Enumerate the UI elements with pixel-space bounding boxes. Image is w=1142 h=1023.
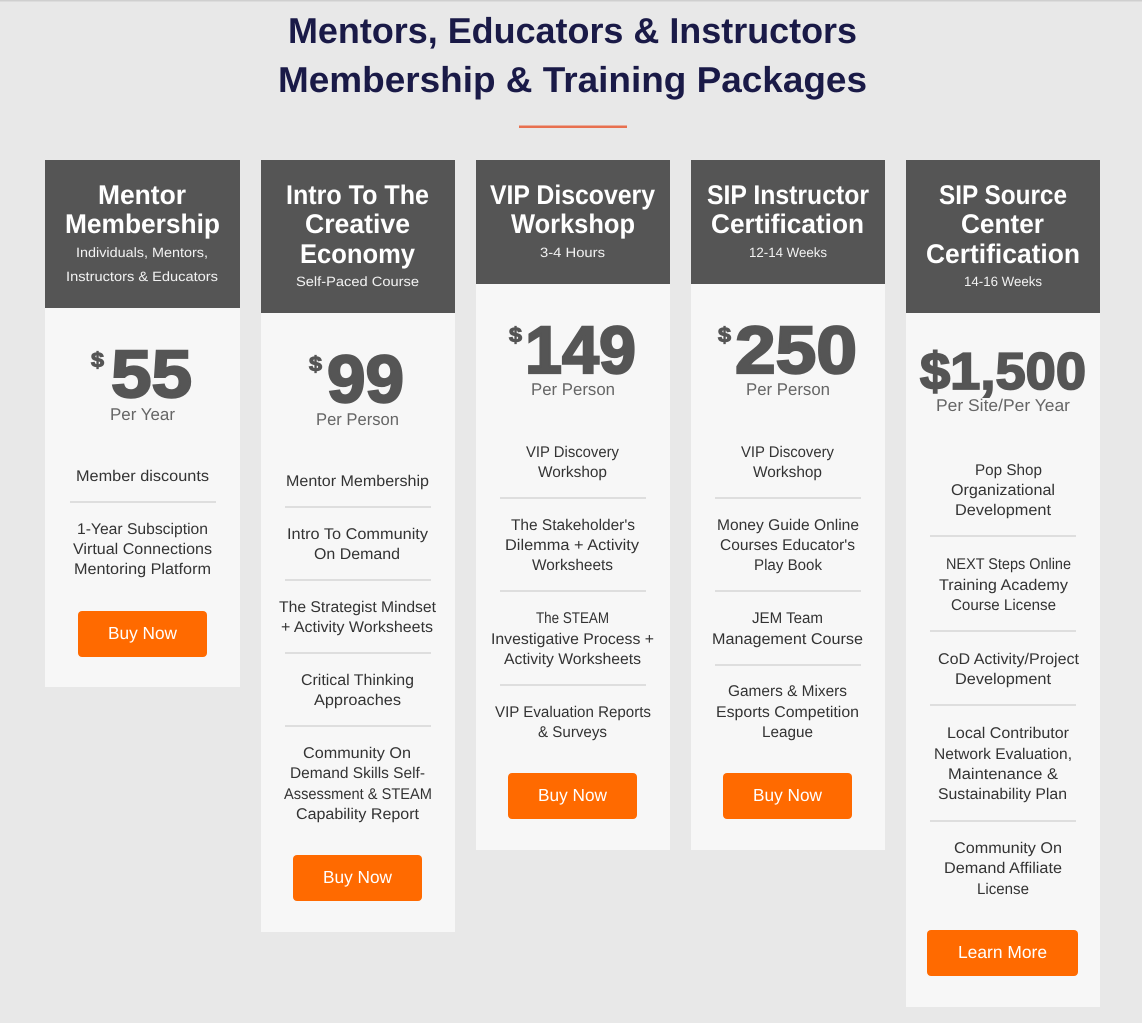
feature list: On Demand — [314, 546, 400, 563]
feature list: License — [977, 881, 1029, 898]
header: SIP Instructor Certification: Certification — [711, 209, 864, 239]
price: $1,500 per site per year: Per Site/Per Year — [936, 396, 1070, 415]
price: $99 per person: 99 — [327, 342, 404, 417]
header: SIP Source Center Certification: 14-16 Weeks — [964, 274, 1042, 289]
feature list: VIP Discovery — [741, 444, 834, 461]
feature list: Community On — [303, 745, 411, 762]
header: Mentor Membership: Mentor — [98, 180, 186, 210]
feature list — [70, 468, 216, 578]
feature list: Pop Shop — [975, 462, 1042, 479]
button: Learn More: Learn More — [958, 942, 1047, 962]
header: SIP Source Center Certification: SIP Source — [939, 180, 1067, 210]
header: VIP Discovery Workshop: Workshop — [511, 209, 635, 239]
feature list — [930, 462, 1080, 898]
feature list: Management Course — [712, 631, 863, 648]
feature list: Critical Thinking — [301, 672, 414, 689]
feature list: The Stakeholder's — [511, 517, 635, 534]
feature list: Virtual Connections — [73, 541, 212, 558]
feature list: The Strategist Mindset — [279, 599, 437, 616]
button: Buy Now: Buy Now — [108, 623, 177, 643]
feature list: Money Guide Online — [717, 517, 859, 534]
price: $55 per year — [91, 337, 192, 424]
title underline — [519, 126, 627, 128]
button: Buy Now — [78, 611, 207, 657]
feature list: Member discounts — [76, 468, 209, 485]
button: Buy Now — [508, 773, 637, 819]
header: Intro To The Creative Economy: Intro To The — [286, 180, 429, 210]
header: Intro To The Creative Economy: Creative — [305, 209, 410, 239]
feature list: Dilemma + Activity — [505, 537, 639, 554]
price: $99 per person: $ — [309, 353, 322, 376]
header: SIP Instructor Certification — [691, 160, 885, 284]
feature list: Workshop — [538, 464, 607, 481]
feature list: Demand Skills Self- — [290, 765, 425, 782]
panel: Mentor Membership — [45, 160, 240, 687]
price: $149 per person: $ — [509, 324, 522, 347]
price: $55 per year: Per Year — [110, 405, 175, 424]
button: Buy Now — [723, 773, 852, 819]
header: Intro To The Creative Economy: Economy — [300, 239, 415, 269]
panel: Intro To The Creative Economy — [261, 160, 455, 932]
feature list: Mentoring Platform — [74, 561, 211, 578]
feature list: League — [762, 724, 813, 741]
button: Buy Now: Buy Now — [323, 867, 392, 887]
panel: SIP Source Center Certification — [906, 160, 1100, 1007]
title — [278, 10, 867, 100]
feature list: Investigative Process + — [491, 631, 654, 648]
feature list: + Activity Worksheets — [281, 619, 433, 636]
feature list: Worksheets — [532, 557, 613, 574]
header: SIP Source Center Certification — [906, 160, 1100, 313]
header: VIP Discovery Workshop — [476, 160, 670, 284]
panel: VIP Discovery Workshop — [476, 160, 670, 850]
button: Buy Now: Buy Now — [753, 785, 822, 805]
feature list: Assessment & STEAM — [284, 786, 432, 803]
title: Mentors, Educators & Instructors — [288, 10, 857, 51]
feature list: Approaches — [314, 692, 401, 709]
feature list: Gamers & Mixers — [728, 683, 847, 700]
title: Membership & Training Packages — [278, 59, 867, 100]
feature list: Course License — [951, 597, 1056, 614]
feature list: Esports Competition — [716, 704, 859, 721]
feature list: Activity Worksheets — [504, 651, 641, 668]
feature list: Play Book — [754, 557, 822, 574]
price: $55 per year: $ — [91, 349, 104, 372]
feature list: Development — [955, 671, 1052, 688]
feature list: VIP Discovery — [526, 444, 619, 461]
feature list: VIP Evaluation Reports — [495, 704, 651, 721]
price: $1,500 per site per year: $1,500 — [920, 343, 1086, 401]
feature list: Mentor Membership — [286, 473, 429, 490]
header: VIP Discovery Workshop: 3-4 Hours — [540, 245, 605, 260]
price: $149 per person: Per Person — [531, 380, 615, 399]
feature list — [491, 444, 654, 741]
feature list: Community On — [954, 840, 1062, 857]
header: Mentor Membership — [45, 160, 240, 308]
header: SIP Source Center Certification: Center — [961, 209, 1044, 239]
price: $250 per person: $ — [718, 324, 731, 347]
header: Mentor Membership: Instructors & Educators — [66, 269, 218, 284]
feature list: Courses Educator's — [720, 537, 855, 554]
feature list: Network Evaluation, — [934, 746, 1072, 763]
header: VIP Discovery Workshop: VIP Discovery — [490, 180, 655, 210]
price: $250 per person: 250 — [735, 313, 857, 388]
feature list: CoD Activity/Project — [938, 651, 1080, 668]
feature list: Demand Affiliate — [944, 860, 1062, 877]
header: Intro To The Creative Economy — [261, 160, 455, 313]
price: $250 per person: Per Person — [746, 380, 830, 399]
header: Mentor Membership: Individuals, Mentors, — [76, 245, 208, 260]
feature list: Workshop — [753, 464, 822, 481]
price: $149 per person: 149 — [525, 313, 636, 388]
feature list: Local Contributor — [947, 725, 1069, 742]
price: $55 per year: 55 — [111, 337, 192, 412]
feature list — [712, 444, 863, 741]
header: Intro To The Creative Economy: Self-Paced Course — [296, 274, 419, 289]
feature list: Organizational — [951, 482, 1055, 499]
header: SIP Instructor Certification: 12-14 Weeks — [749, 245, 827, 260]
header: SIP Source Center Certification: Certification — [926, 239, 1080, 269]
header: Mentor Membership: Membership — [65, 209, 220, 239]
button: Buy Now — [293, 855, 422, 901]
feature list: Development — [955, 502, 1052, 519]
feature list: Capability Report — [296, 806, 420, 823]
feature list: & Surveys — [538, 724, 607, 741]
feature list: 1-Year Subsciption — [77, 521, 208, 538]
feature list: The STEAM — [536, 610, 609, 627]
button: Buy Now: Buy Now — [538, 785, 607, 805]
price: $99 per person: Per Person — [316, 410, 399, 429]
header: SIP Instructor Certification: SIP Instructor — [707, 180, 869, 210]
feature list: NEXT Steps Online — [946, 556, 1071, 573]
button: Learn More — [927, 930, 1078, 976]
feature list: Intro To Community — [287, 526, 428, 543]
feature list: Training Academy — [939, 577, 1068, 594]
panel: SIP Instructor Certification — [691, 160, 885, 850]
feature list: JEM Team — [752, 610, 823, 627]
price: $99 per person — [309, 342, 404, 429]
feature list: Maintenance & — [948, 766, 1059, 783]
feature list — [279, 473, 437, 823]
feature list: Sustainability Plan — [938, 786, 1067, 803]
